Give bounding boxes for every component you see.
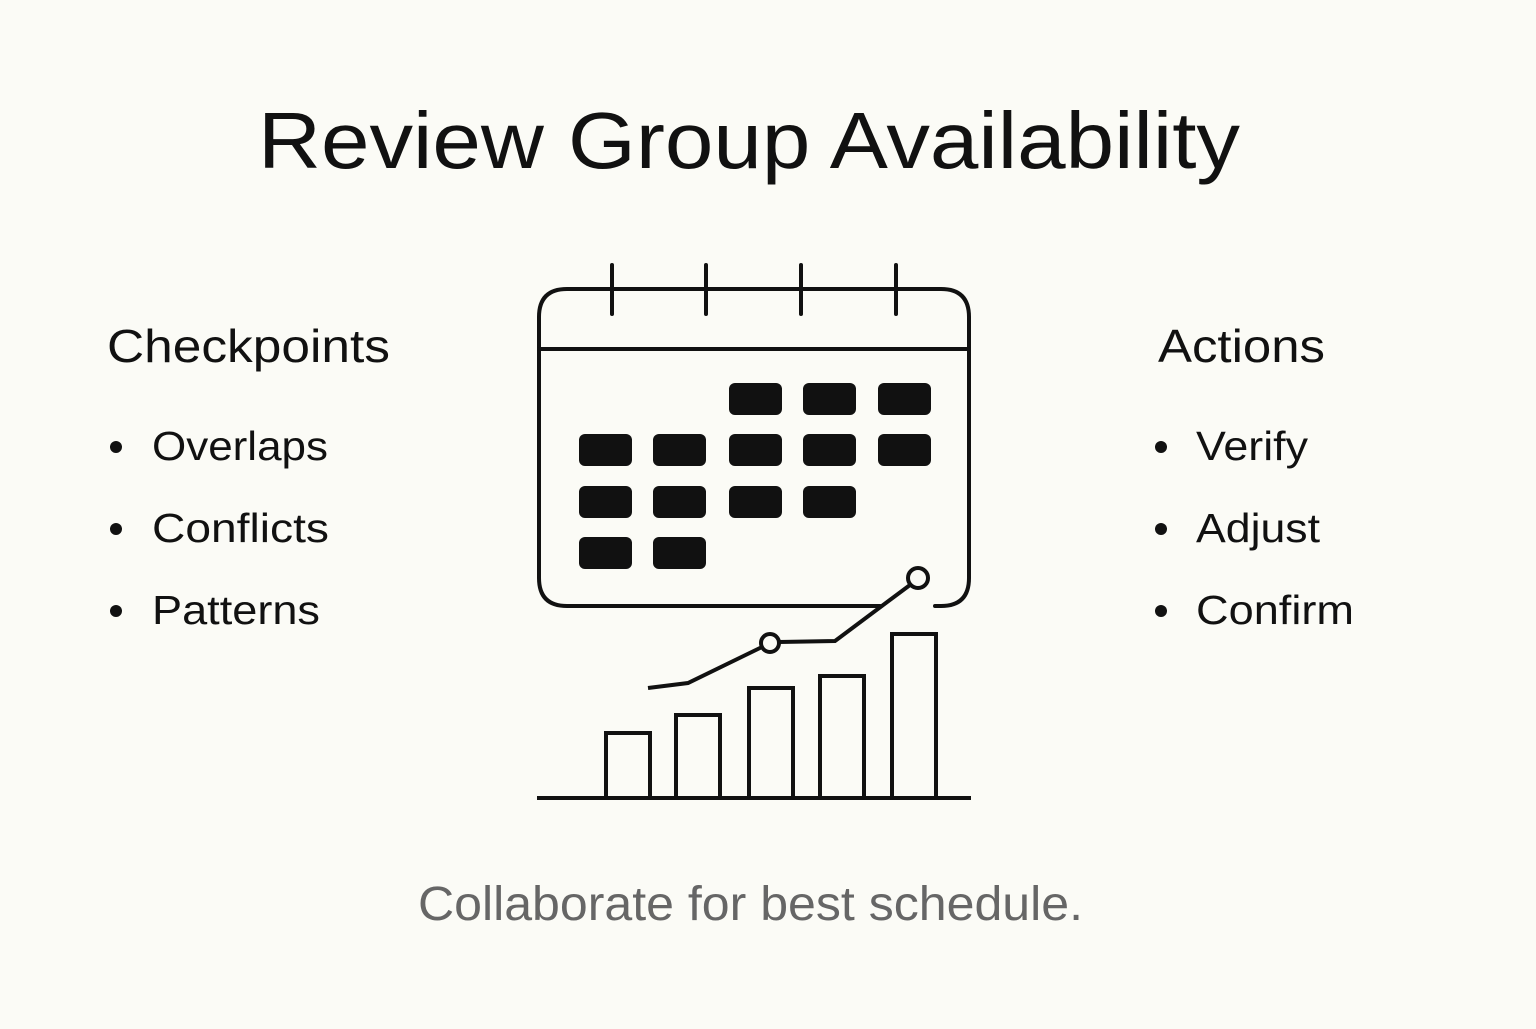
- icon: calendar: [539, 265, 969, 606]
- list: actions: Adjust: [1196, 505, 1321, 551]
- list: checkpoints: [110, 423, 329, 633]
- panel: checkpoints: [107, 320, 390, 633]
- heading: actions: Actions: [1158, 320, 1325, 372]
- footer caption: Collaborate for best schedule.: [418, 878, 1083, 931]
- list: actions: [1155, 423, 1354, 633]
- list: actions: Confirm: [1196, 587, 1354, 633]
- list: checkpoints: Patterns: [152, 587, 320, 633]
- chart: bar and trend line: [537, 568, 971, 798]
- list: actions: Verify: [1196, 423, 1309, 469]
- heading: checkpoints: Checkpoints: [107, 320, 390, 372]
- panel: actions: [1155, 320, 1354, 633]
- title: Review Group Availability: [258, 96, 1240, 185]
- list: checkpoints: Overlaps: [152, 423, 328, 469]
- list: checkpoints: Conflicts: [152, 505, 329, 551]
